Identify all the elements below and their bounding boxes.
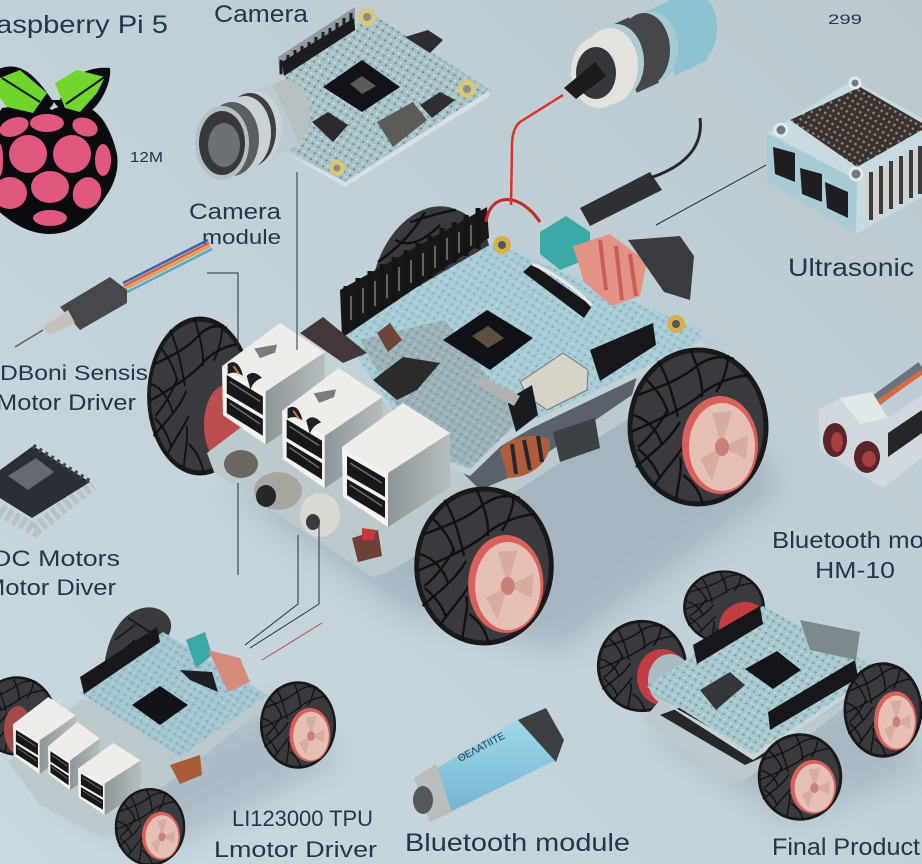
camera lens: [195, 80, 310, 180]
rear wheel left: [148, 317, 252, 475]
board texture dense: [360, 320, 520, 468]
labels: Camera module: [189, 199, 282, 249]
small car board: [80, 632, 267, 757]
final product robot: [597, 571, 922, 820]
bluetooth cylinder: [413, 708, 564, 822]
small car board texture: [80, 632, 267, 757]
usb ports: [222, 323, 325, 445]
lower dark component: [553, 418, 600, 462]
small car top wheel: [105, 607, 171, 680]
final product texture: [647, 606, 880, 755]
chip icon: [0, 446, 92, 530]
final product board: [647, 606, 880, 755]
usb c port: [520, 353, 588, 410]
main board: [340, 243, 702, 470]
final product lower plate: [643, 680, 880, 783]
label: Bluetooth module HM-10: HM-10: [815, 557, 895, 583]
sensor with rainbow wires: [15, 240, 212, 347]
heading: Raspberry Pi 5: aspberry Pi 5: [0, 11, 168, 39]
sensor cylinder, top: [564, 0, 717, 108]
label: Bluetooth module HM-10: Bluetooth mo: [772, 527, 922, 553]
labels: Camera module: module: [202, 227, 281, 249]
ribbon socket: [523, 264, 592, 318]
small robot car, bottom left: [0, 607, 336, 864]
labels: Camera module: Camera: [189, 199, 282, 224]
lower plate: [207, 332, 703, 577]
board edge: [340, 247, 703, 476]
small car chip: [132, 686, 188, 725]
connector wires: [207, 165, 766, 660]
small car ports: [13, 697, 76, 774]
small car wheels: [260, 682, 336, 768]
small car back-left wheel: [0, 676, 56, 756]
front right wheel: [628, 348, 768, 506]
gap under board: [460, 365, 640, 490]
final product wheels: [844, 663, 922, 757]
final product chip: [745, 651, 801, 689]
labels: motor driver: LI123000 TPU: [232, 806, 373, 831]
left dark and red cluster: [300, 317, 367, 363]
main soc chip: [443, 310, 533, 370]
final product top components: [800, 620, 860, 660]
right header: [590, 323, 656, 381]
labels: motor driver: Lmotor Driver: [214, 837, 377, 862]
silver capacitor: [473, 376, 520, 406]
final product dark under board: [660, 700, 790, 765]
final product shadow: [650, 680, 922, 820]
ultrasonic module: [767, 78, 922, 234]
labels: DC motors and motor driver: [0, 546, 120, 600]
final product headers: [693, 606, 858, 730]
labels: motor driver: [214, 806, 377, 862]
cables to top: [486, 200, 540, 222]
front wheel: [415, 487, 553, 645]
small car drop shadow: [50, 700, 340, 850]
small sensor module, right: [818, 367, 922, 488]
small car plate: [8, 698, 266, 837]
label: Final Product: Final Product: [772, 834, 920, 861]
label: Ultrasonic: Ultrasonic: [788, 254, 914, 282]
main car drop shadow: [230, 350, 780, 650]
lower black header: [507, 385, 538, 432]
labels: sensor and motor driver: [0, 362, 148, 415]
labels: sensor and motor driver: DBoni Sensis: [0, 362, 148, 385]
board texture: [340, 243, 702, 470]
pin header top: [340, 207, 489, 338]
label: 12M: 12M: [130, 149, 163, 166]
small car connectors: [180, 632, 250, 692]
camera board: [278, 7, 490, 187]
striped coil: [500, 436, 550, 478]
colored connectors top: [540, 216, 590, 270]
brown small part: [377, 323, 402, 352]
label: Bluetooth module HM-10: [772, 527, 922, 583]
small car lower coil: [170, 755, 202, 784]
label: Bluetooth module: Bluetooth module: [405, 829, 630, 857]
icon: raspberry logo: [0, 66, 118, 234]
label: 299: 299: [828, 11, 862, 27]
final product dark component: [700, 672, 745, 710]
final product rear wheels: [597, 571, 771, 712]
small car header: [80, 627, 160, 694]
final product board edge: [647, 664, 882, 760]
heading: Camera: Camera: [214, 1, 309, 28]
dark component: [373, 357, 440, 400]
bluetooth cylinder: ΘΕΛΑΤΙΙΤΕ: [456, 731, 507, 765]
rear wheel top: [372, 206, 490, 310]
small camera parts on chassis: [224, 450, 382, 562]
main robot car: [148, 95, 768, 645]
